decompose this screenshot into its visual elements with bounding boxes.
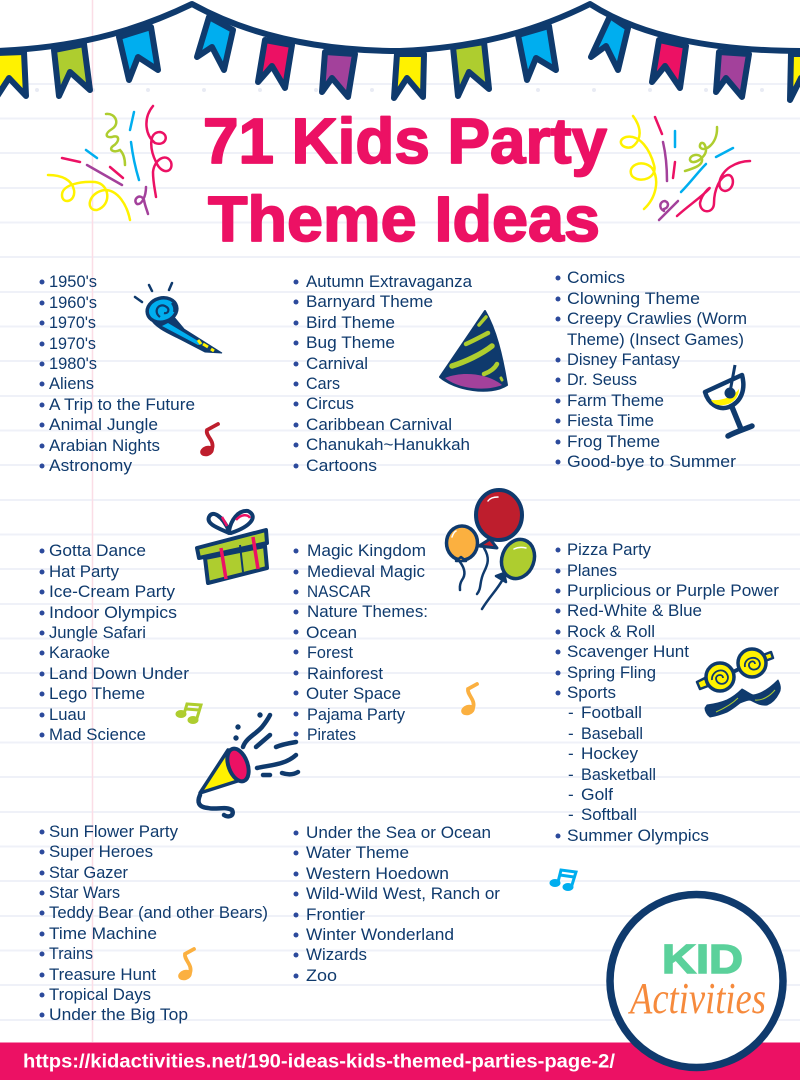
list: column 1 block 2: Land Down Under [49, 664, 189, 683]
list: column 2 block 1: Caribbean Carnival [306, 415, 452, 434]
list: column 2 block 1: Cars [306, 374, 340, 393]
list: column 3 block 2: Baseball [581, 724, 643, 743]
title [203, 105, 607, 255]
list: column 1 block 2: Luau [49, 705, 86, 724]
list: column 2 block 1: Circus [306, 394, 354, 413]
icon: party hat [440, 311, 507, 391]
icon: orange music note lower [177, 949, 194, 981]
title: Theme Ideas [208, 183, 600, 255]
list: column 3 block 1: Dr. Seuss [567, 370, 637, 389]
list: column 1 block 1: Aliens [49, 374, 94, 393]
list: column 2 block 3: Frontier [306, 905, 365, 924]
list: column 1 block 3: Sun Flower Party [49, 822, 178, 841]
list: column 1 block 3: Under the Big Top [49, 1005, 188, 1024]
list: column 3 block 2: Red-White & Blue [567, 601, 702, 620]
list: column 1 block 1: Animal Jungle [49, 415, 158, 434]
list: column 2 block 2: Ocean [306, 623, 357, 642]
list: column 1 block 2: Hat Party [49, 562, 119, 581]
list: column 1 block 1: 1960's [49, 293, 97, 312]
logo: Kid Activities badge: KID [662, 936, 743, 982]
list: column 2 block 1: Cartoons [306, 456, 377, 475]
list: column 1 block 1: 1980's [49, 354, 97, 373]
footer bar with URL: https://kidactivities.net/190-ideas-kids-themed-parties-page-2/ [23, 1052, 616, 1072]
list: column 3 block 2: - [568, 724, 574, 743]
list: column 1 block 1: 1950's [49, 272, 97, 291]
list: column 1 block 3: Trains [49, 944, 93, 963]
list: column 1 block 3 [40, 822, 268, 1024]
list: column 3 block 2: Summer Olympics [567, 826, 709, 845]
list: column 3 block 1: Clowning Theme [567, 289, 700, 308]
list: column 1 block 3: Treasure Hunt [49, 965, 156, 984]
list: column 2 block 2: Forest [307, 643, 353, 662]
icon: balloons [446, 490, 540, 609]
list: column 1 block 2 [40, 541, 189, 744]
icon: gift box [197, 511, 267, 583]
list: column 2 block 2 [294, 541, 428, 744]
list: column 2 block 2: Nature Themes: [307, 602, 428, 621]
list: column 1 block 3: Star Gazer [49, 863, 128, 882]
list: column 2 block 2: Medieval Magic [307, 562, 425, 581]
list: column 2 block 3: Wild-Wild West, Ranch or [306, 884, 500, 903]
list: column 1 block 2: Ice-Cream Party [49, 582, 176, 601]
list: column 1 block 2: Lego Theme [49, 684, 145, 703]
list: column 3 block 2: Scavenger Hunt [567, 642, 689, 661]
icon: party popper [199, 713, 298, 816]
list: column 1 block 1 [40, 272, 195, 475]
icon: blue music note [550, 870, 576, 890]
list: column 3 block 2: Sports [567, 683, 616, 702]
list: column 3 block 2: Planes [567, 561, 617, 580]
list: column 3 block 2: - [568, 744, 574, 763]
icon: red music note [199, 424, 218, 457]
list: column 1 block 1: Arabian Nights [49, 436, 160, 455]
list: column 2 block 1: Bug Theme [306, 333, 395, 352]
list: column 1 block 2: Gotta Dance [49, 541, 146, 560]
list: column 3 block 1: Disney Fantasy [567, 350, 680, 369]
list: column 1 block 2: Karaoke [49, 643, 110, 662]
list: column 3 block 2: Softball [581, 805, 637, 824]
icon: green music note [176, 704, 201, 724]
list: column 2 block 3: Under the Sea or Ocean [306, 823, 491, 842]
list: column 3 block 2: Football [581, 703, 642, 722]
list: column 2 block 2: Rainforest [307, 664, 383, 683]
list: column 1 block 2: Mad Science [49, 725, 146, 744]
list: column 3 block 2: Hockey [581, 744, 639, 763]
list: column 3 block 1: Farm Theme [567, 391, 664, 410]
list: column 2 block 1: Chanukah~Hanukkah [306, 435, 470, 454]
list: column 3 block 2: Rock & Roll [567, 622, 655, 641]
list: column 2 block 3: Water Theme [306, 843, 409, 862]
list: column 2 block 2: Magic Kingdom [307, 541, 426, 560]
list: column 3 block 2: - [568, 765, 574, 784]
icon: glasses and moustache [697, 649, 780, 717]
list: column 2 block 2: Outer Space [306, 684, 401, 703]
list: column 2 block 3: Zoo [306, 966, 337, 985]
logo: Kid Activities badge: Activities [628, 974, 766, 1023]
list: column 3 block 2: - [568, 785, 574, 804]
icon: right confetti [621, 116, 750, 220]
list: column 1 block 1: A Trip to the Future [49, 395, 195, 414]
list: column 3 block 2 [556, 540, 779, 845]
list: column 3 block 2: Spring Fling [567, 663, 656, 682]
icon: orange music note [460, 684, 477, 716]
footer bar with URL [0, 1042, 800, 1080]
list: column 2 block 2: Pirates [307, 725, 356, 744]
list: column 3 block 1: Creepy Crawlies (Worm [567, 309, 747, 328]
list: column 2 block 3 [294, 823, 500, 985]
list: column 1 block 1: Astronomy [49, 456, 133, 475]
list: column 2 block 3: Winter Wonderland [306, 925, 454, 944]
list: column 3 block 1: Frog Theme [567, 432, 660, 451]
list: column 1 block 3: Star Wars [49, 883, 120, 902]
icon: party blower [135, 283, 222, 353]
list: column 3 block 2: Purplicious or Purple Power [567, 581, 779, 600]
list: column 1 block 2: Jungle Safari [49, 623, 146, 642]
list: column 3 block 1: Theme) (Insect Games) [567, 330, 744, 349]
list: column 1 block 1: 1970's [49, 334, 96, 353]
list: column 2 block 1: Barnyard Theme [306, 292, 433, 311]
icon: left confetti [48, 106, 171, 220]
list: column 1 block 3: Time Machine [49, 924, 157, 943]
list: column 2 block 1: Carnival [306, 354, 368, 373]
list: column 3 block 2: Basketball [581, 765, 656, 784]
list: column 1 block 3: Super Heroes [49, 842, 153, 861]
list: column 3 block 2: - [568, 703, 574, 722]
list: column 2 block 2: NASCAR [307, 582, 371, 601]
list: column 3 block 2: - [568, 805, 574, 824]
list: column 3 block 1 [556, 268, 747, 471]
list: column 3 block 1: Fiesta Time [567, 411, 654, 430]
bunting banner [0, 4, 800, 100]
list: column 2 block 3: Wizards [306, 945, 367, 964]
logo: Kid Activities badge [610, 894, 783, 1068]
list: column 3 block 2: Golf [581, 785, 613, 804]
icon: cocktail glass [705, 365, 752, 436]
list: column 2 block 1: Autumn Extravaganza [306, 272, 473, 291]
list: column 2 block 3: Western Hoedown [306, 864, 449, 883]
list: column 1 block 2: Indoor Olympics [49, 603, 177, 622]
list: column 2 block 1 [294, 272, 473, 475]
list: column 3 block 1: Comics [567, 268, 625, 287]
list: column 1 block 3: Tropical Days [49, 985, 151, 1004]
list: column 3 block 1: Good-bye to Summer [567, 452, 736, 471]
list: column 2 block 2: Pajama Party [307, 705, 405, 724]
list: column 1 block 1: 1970's [49, 313, 96, 332]
list: column 3 block 2: Pizza Party [567, 540, 651, 559]
list: column 1 block 3: Teddy Bear (and other Bears) [49, 903, 268, 922]
title: 71 Kids Party [203, 105, 607, 177]
list: column 2 block 1: Bird Theme [306, 313, 395, 332]
